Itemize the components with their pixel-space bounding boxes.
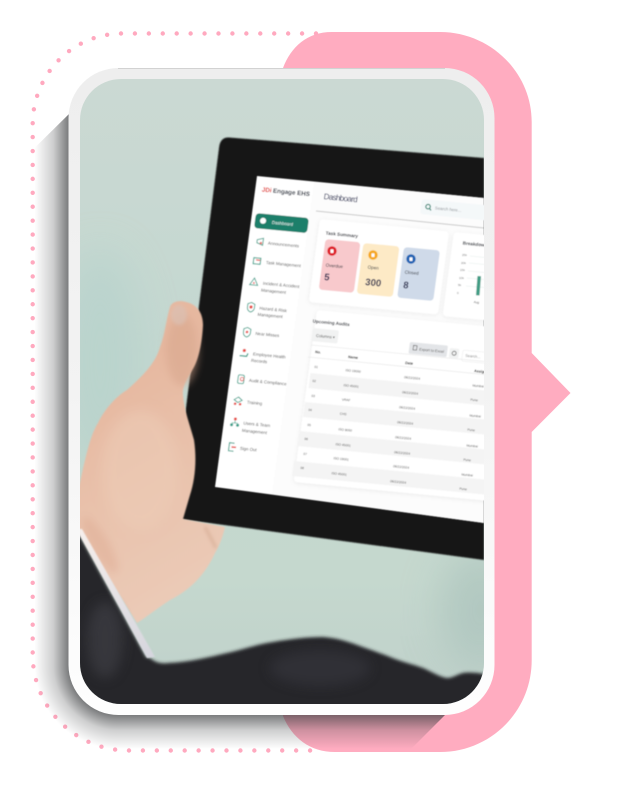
export to excel button: Export to Excel (419, 347, 444, 354)
y axis labels (457, 253, 467, 295)
hand holding tablet (70, 301, 225, 623)
active item: dashboard (254, 213, 309, 233)
pink arrow-shaped background panel (283, 32, 570, 752)
row 04: 04 (308, 408, 312, 412)
row 04 (308, 408, 475, 432)
item: sign out: Sign Out (240, 446, 258, 452)
columns button (311, 328, 339, 344)
item: incident and accident management: Management (261, 288, 287, 295)
knuckle highlight (102, 410, 178, 530)
item: near misses: Near Misses (255, 331, 280, 338)
dashboard heading: Dashboard (323, 192, 358, 204)
closed card (397, 247, 440, 301)
alternating row bands (292, 373, 490, 495)
item: announcements: Announcements (268, 241, 299, 248)
long drop shadow (34, 113, 445, 749)
row 03: Mumbai (469, 413, 481, 419)
item: task management: Task Management (266, 260, 302, 268)
item: employee health records: Employee Health (253, 351, 287, 360)
row 01: Mumbai (472, 383, 484, 389)
sidebar (228, 213, 309, 453)
frame top edge (118, 68, 445, 70)
item: incident and accident management: Incident & Accident (263, 281, 301, 289)
item: employee health records (239, 348, 286, 364)
closed icon (406, 254, 416, 264)
row 07: 07 (303, 452, 307, 456)
open label: Open (367, 265, 380, 271)
overdue card (319, 239, 360, 293)
row 05: 05 (307, 423, 311, 427)
row 04: CHS (339, 412, 347, 416)
y axis labels: 10k (459, 276, 464, 280)
search box: Search here... (435, 205, 462, 213)
item: audit and compliance: Audit & Compliance (249, 378, 287, 386)
overdue value: 5 (324, 272, 331, 284)
breakdown card (443, 232, 524, 323)
item: users and team management: Users & Team (243, 421, 271, 428)
row 03: 03 (311, 394, 315, 398)
row 02: ISO 45001 (343, 383, 359, 389)
row 02 (312, 379, 478, 402)
item: users and team management: Management (242, 428, 268, 435)
row 04: Pune (467, 428, 475, 432)
photo panel (80, 79, 484, 704)
item: announcements (257, 238, 299, 249)
row 05: Mumbai (466, 443, 478, 449)
item: training: Training (247, 400, 263, 406)
y axis labels: 15k (460, 268, 465, 272)
row 03: 06/22/2024 (399, 405, 416, 411)
row 02: 06/22/2024 (402, 390, 419, 396)
y axis labels: 25k (462, 253, 467, 257)
tablet screen (214, 175, 484, 524)
item: sign out (228, 443, 258, 453)
background tint lower right (438, 558, 484, 668)
task summary heading: Task Summary (325, 231, 359, 239)
audits heading: Upcoming Audits (312, 319, 351, 327)
row 07 (303, 452, 473, 478)
row 06 (304, 437, 471, 462)
x axis label: Aug (473, 300, 480, 305)
panel: task summary (318, 230, 440, 301)
columns button: Columns ▾ (316, 333, 335, 340)
y axis labels: 20k (461, 261, 466, 265)
grid lines (466, 256, 490, 288)
row 04: 06/22/2024 (397, 420, 414, 426)
infographic canvas (30, 31, 570, 753)
table search box: Search... (465, 354, 481, 359)
overdue icon (327, 246, 337, 256)
audit rows (300, 365, 484, 491)
table search box (462, 350, 503, 365)
logo: JDiEngage EHS (261, 187, 310, 198)
green bar (476, 276, 481, 296)
row 08: Pune (459, 487, 467, 491)
sleeve highlight (87, 602, 123, 678)
row 05: 06/22/2024 (395, 435, 412, 441)
item: employee health records: Records (251, 358, 267, 364)
y axis labels: 0 (457, 291, 459, 295)
photo background (80, 79, 484, 704)
audits card (294, 310, 557, 505)
header divider (316, 211, 484, 228)
main content background (434, 193, 484, 524)
row 06: 06 (304, 437, 308, 441)
item: near misses (242, 326, 280, 338)
lower hand shade (76, 513, 124, 577)
open icon (368, 250, 378, 260)
item: incident and accident management (249, 278, 301, 296)
finger crease (205, 527, 216, 548)
row 07: 06/22/2024 (393, 464, 410, 470)
panel: upcoming audits (292, 310, 557, 505)
row 05: ISO 9000 (338, 427, 352, 433)
row 08: 08 (300, 466, 304, 470)
row 06: 06/22/2024 (394, 450, 411, 456)
item: users and team management (229, 417, 271, 435)
export to excel button (408, 342, 448, 357)
row 08: ISO 45001 (331, 471, 347, 477)
row 07: Mumbai (461, 472, 473, 478)
closed value: 8 (403, 280, 410, 292)
item: training (233, 397, 263, 408)
white shirt cuff (79, 529, 155, 658)
row 01 (314, 365, 484, 389)
row 02: 02 (312, 379, 316, 383)
open value: 300 (365, 277, 382, 290)
item: hazard and risk management (246, 302, 288, 320)
overdue label: Overdue (325, 263, 344, 269)
panel: breakdown chart (443, 232, 524, 323)
task summary card (309, 219, 449, 315)
suit sleeve and foreground (70, 530, 495, 712)
table header: Date (405, 361, 413, 366)
dotted outline (33, 34, 316, 750)
thumb tone (166, 314, 198, 386)
row 08: 06/22/2024 (390, 479, 407, 485)
table header: Assigned (474, 369, 491, 375)
sleeve highlight right (270, 650, 370, 686)
row 01: ISO 19000 (345, 368, 361, 374)
row 07: ISO 19001 (333, 456, 349, 462)
table header (308, 345, 491, 375)
item: audit and compliance (237, 375, 288, 388)
y axis labels: 5k (458, 283, 462, 287)
tablet (182, 136, 484, 561)
table header: Name (348, 355, 358, 360)
device frame (68, 68, 494, 715)
row 01: 06/22/2024 (404, 375, 421, 381)
open card (357, 243, 400, 297)
row 05 (307, 423, 478, 449)
row 02: Pune (470, 398, 478, 402)
closed label: Closed (404, 270, 420, 276)
row 03: VRAF (342, 398, 351, 402)
row 06: ISO 45001 (335, 442, 351, 448)
table header: No. (315, 350, 321, 355)
item: hazard and risk management: Hazard & Risk (259, 306, 288, 313)
thumbnail (171, 305, 187, 325)
item: task management (253, 258, 302, 268)
refresh button (449, 348, 460, 358)
row 06: Pune (463, 458, 471, 462)
breakdown heading: Breakdown (462, 241, 488, 248)
background tint left (80, 274, 124, 434)
row 08 (300, 466, 467, 491)
active item: dashboard: Dashboard (272, 220, 294, 227)
row 01: 01 (314, 365, 318, 369)
search box (424, 202, 484, 221)
item: hazard and risk management: Management (257, 312, 284, 319)
tablet bezel (172, 137, 484, 560)
row 03 (311, 394, 481, 419)
